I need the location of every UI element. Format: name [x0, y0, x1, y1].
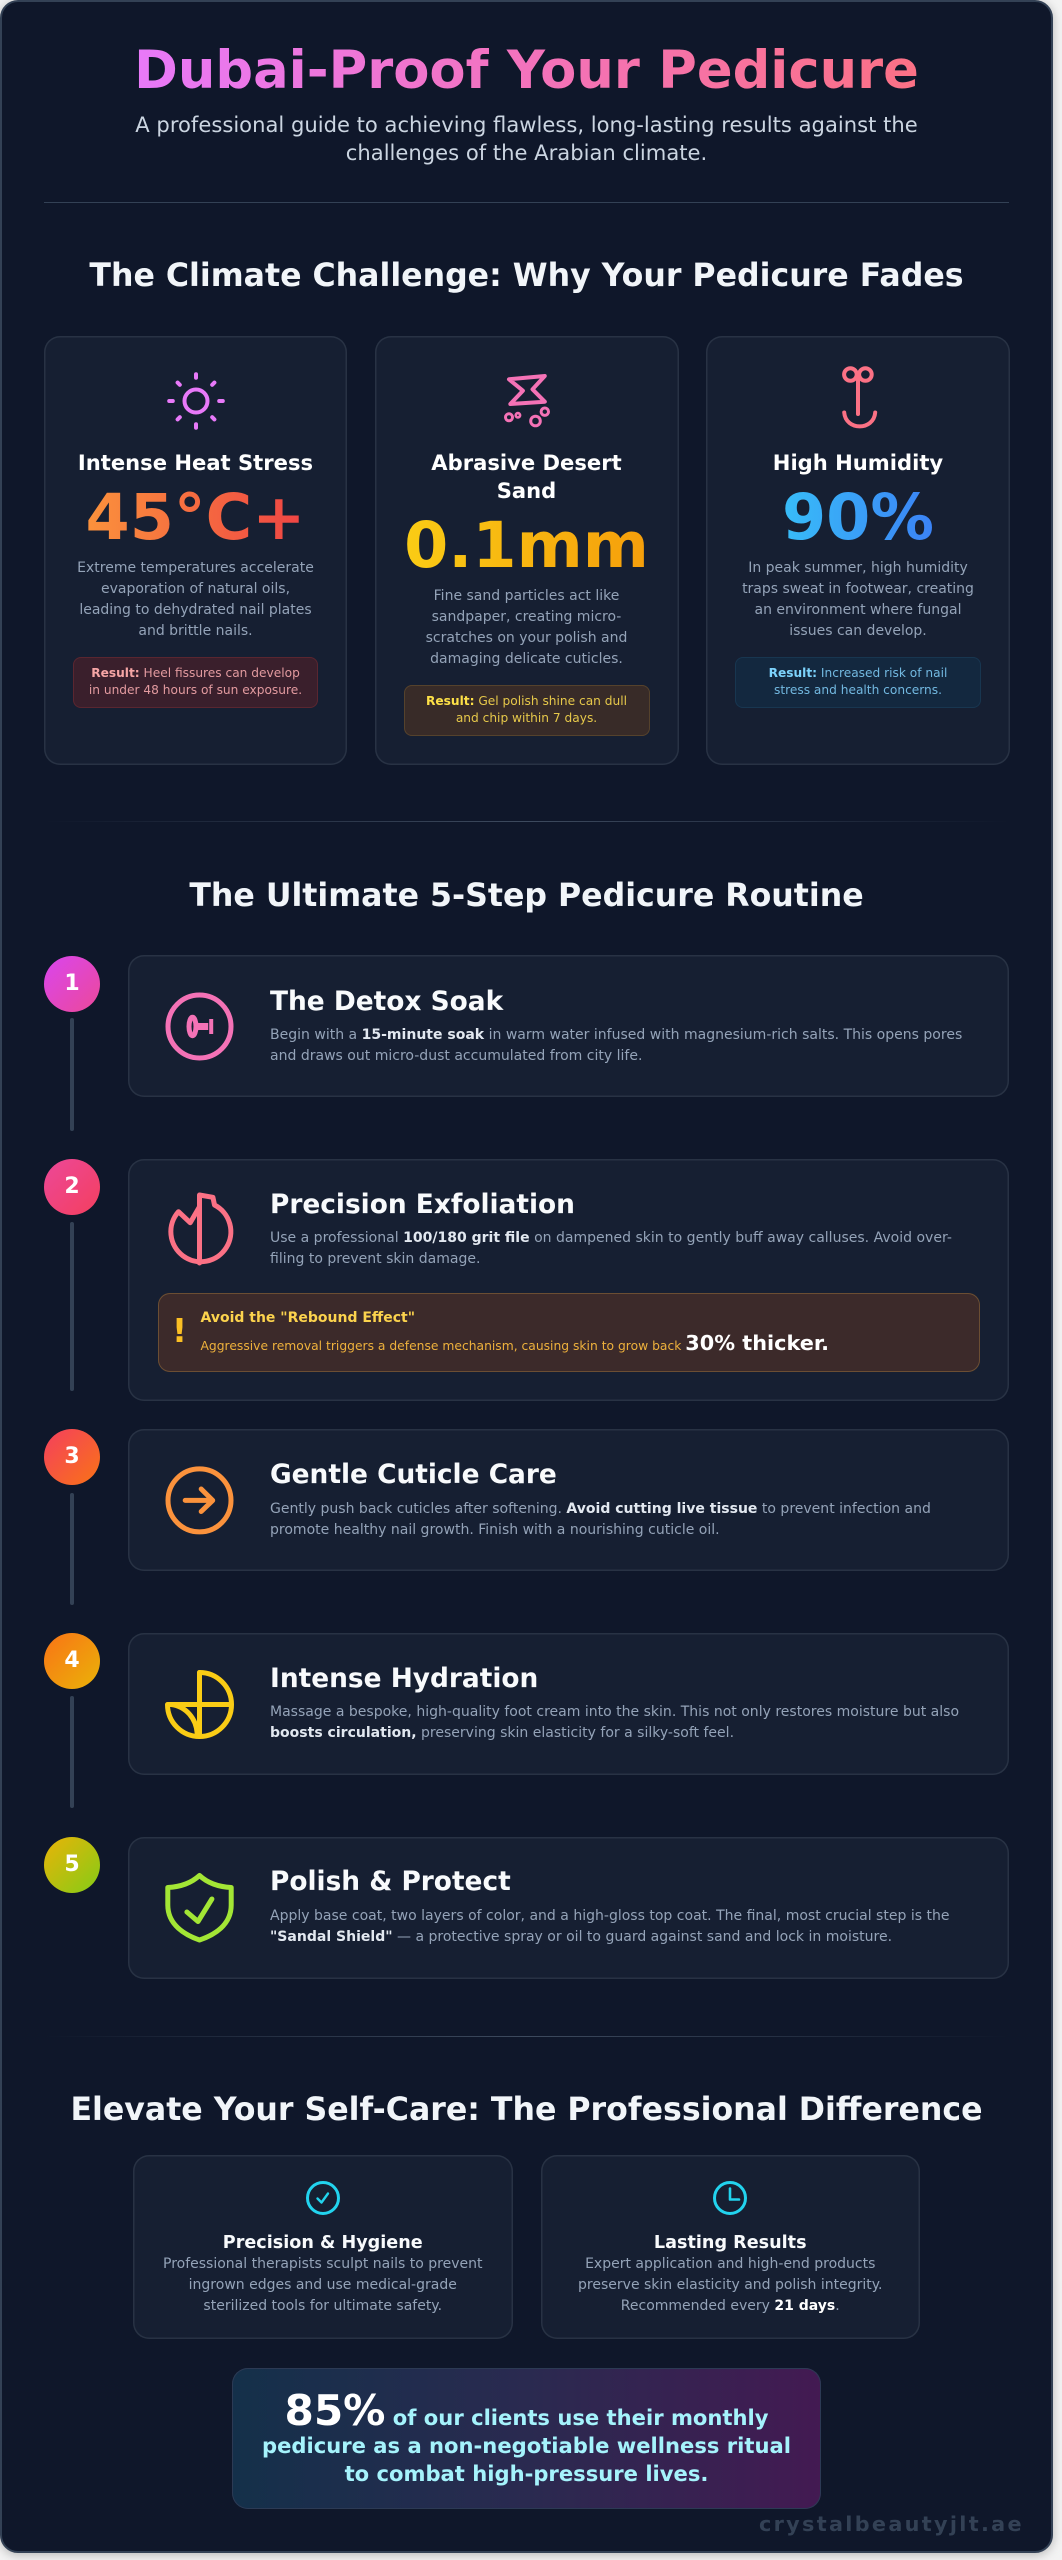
step 1 panel: detox soak [128, 955, 1009, 1097]
step body [270, 1908, 950, 1944]
step body: promote healthy nail growth. Finish with a nourishing cuticle oil. [270, 1522, 720, 1538]
description: Professional therapists sculpt nails to prevent [163, 2256, 482, 2272]
stat: 45°C+: 45°C+ [86, 480, 305, 554]
result callout: Result: Increased risk of nail [769, 666, 947, 680]
step body [270, 1026, 962, 1064]
step 4 number: 4 [64, 1648, 80, 1673]
panel: high humidity [706, 336, 1010, 765]
result callout [735, 657, 981, 708]
step 2 number [44, 1159, 100, 1215]
stat: 0.1mm: 0.1mm [404, 508, 649, 582]
step 3 number: 3 [64, 1444, 80, 1469]
card title: Intense Heat Stress [78, 450, 313, 475]
step 1 number [44, 956, 100, 1012]
step 2 panel: precision exfoliation [128, 1159, 1009, 1401]
heading: 5-step routine: The Ultimate 5-Step Pedicure Routine [189, 878, 864, 914]
panel: abrasive desert sand [374, 336, 678, 765]
step body [270, 1704, 959, 1741]
step 1 number: 1 [64, 970, 80, 996]
step 4 number [44, 1633, 100, 1689]
description: traps sweat in footwear, creating [742, 580, 974, 596]
step title: Gentle Cuticle Care [270, 1458, 557, 1490]
description: In peak summer, high humidity [748, 560, 968, 576]
icon: soak [166, 992, 234, 1060]
icon: hydration [165, 1670, 234, 1739]
watermark: crystalbeautyjlt.ae [759, 2512, 1024, 2536]
description: scratches on your polish and [426, 630, 627, 646]
stat: 90%: 90% [782, 480, 934, 554]
description: evaporation of natural oils, [101, 580, 290, 596]
description: Extreme temperatures accelerate [77, 560, 314, 576]
step body: Massage a bespoke, high-quality foot cream into the skin. This not only restores moisture but also [270, 1704, 959, 1720]
description [578, 2256, 882, 2314]
step body [270, 1230, 952, 1267]
description [77, 560, 314, 638]
step title: The Detox Soak [270, 986, 503, 1016]
step body: filing to prevent skin damage. [270, 1251, 480, 1267]
description: sandpaper, creating micro- [432, 608, 621, 624]
card title [431, 450, 622, 503]
description: sterilized tools for ultimate safety. [203, 2298, 442, 2314]
card title: Sand [497, 478, 556, 503]
step 3 panel: gentle cuticle care [128, 1429, 1009, 1571]
result callout [404, 685, 650, 736]
title: Dubai-Proof Your Pedicure [134, 40, 919, 101]
step body [270, 1500, 931, 1538]
warning callout [158, 1293, 980, 1372]
result callout [73, 657, 318, 708]
card title: Lasting Results [654, 2232, 807, 2252]
description: preserve skin elasticity and polish integrity. [578, 2277, 882, 2293]
icon: clock [713, 2181, 747, 2215]
step 4 panel: intense hydration [128, 1633, 1009, 1775]
step body: Begin with a 15-minute soak in warm water infused with magnesium-rich salts. This opens pores [270, 1026, 962, 1042]
heading: climate challenge: The Climate Challenge: Why Your Pedicure Fades [89, 258, 964, 294]
icon: shield [165, 1872, 234, 1942]
step title: Precision Exfoliation [270, 1188, 575, 1220]
step title: Polish & Protect [270, 1866, 511, 1896]
description [426, 588, 627, 666]
description: and brittle nails. [138, 622, 253, 638]
description: Fine sand particles act like [434, 588, 619, 604]
description [742, 560, 974, 638]
panel: precision and hygiene [133, 2155, 512, 2339]
stat callout: 85%: 85% of our clients use their monthly [284, 2386, 769, 2435]
step body: Gently push back cuticles after softening. Avoid cutting live tissue to prevent infection and [270, 1500, 931, 1516]
icon: humidity [842, 366, 878, 428]
description: leading to dehydrated nail plates [79, 602, 312, 618]
result callout: in under 48 hours of sun exposure. [89, 683, 302, 697]
card title: Abrasive Desert [431, 450, 622, 475]
icon: hourglass and sand [504, 374, 550, 428]
result callout: Result: Gel polish shine can dull [426, 694, 627, 708]
step body: Use a professional 100/180 grit file on dampened skin to gently buff away calluses. Avoid over- [270, 1230, 952, 1246]
callout heading: Avoid the "Rebound Effect" [200, 1310, 415, 1326]
description: damaging delicate cuticles. [430, 650, 623, 666]
step 2 number: 2 [64, 1174, 80, 1199]
step body: boosts circulation, preserving skin elasticity for a silky-soft feel. [270, 1725, 734, 1741]
result callout: Result: Heel fissures can develop [91, 666, 300, 680]
stat callout: 85%: to combat high-pressure lives. [345, 2461, 708, 2486]
icon: arrow circle [166, 1466, 234, 1534]
stat callout: 85%: pedicure as a non-negotiable wellness ritual [262, 2433, 791, 2458]
step 5 number: 5 [64, 1852, 80, 1877]
description: ingrown edges and use medical-grade [189, 2277, 457, 2293]
step title: Intense Hydration [270, 1662, 538, 1694]
step 3 number [44, 1429, 100, 1485]
icon: file [168, 1192, 234, 1266]
icon: check circle [306, 2181, 340, 2215]
result callout: and chip within 7 days. [456, 711, 597, 725]
card title: Precision & Hygiene [223, 2232, 423, 2252]
panel: lasting results [540, 2155, 920, 2339]
step 5 number [44, 1837, 100, 1893]
callout text: Aggressive removal triggers a defense mechanism, causing skin to grow back 30% thicker. [200, 1331, 829, 1355]
step body: "Sandal Shield" — a protective spray or oil to guard against sand and lock in moisture. [270, 1928, 892, 1944]
heading: professional difference: Elevate Your Self-Care: The Professional Difference [70, 2092, 983, 2128]
step 5 panel: polish and protect [128, 1836, 1009, 1978]
subtitle: A professional guide to achieving flawless, long-lasting results against the [135, 112, 918, 136]
icon: sun [167, 372, 225, 430]
subtitle: challenges of the Arabian climate. [346, 140, 707, 164]
stat callout: 85% [232, 2368, 821, 2509]
description: issues can develop. [789, 622, 927, 638]
step body: Apply base coat, two layers of color, and a high-gloss top coat. The final, most crucial step is the [270, 1908, 950, 1924]
description: Recommended every 21 days. [621, 2298, 840, 2314]
result callout: stress and health concerns. [774, 683, 942, 697]
card title: High Humidity [773, 450, 943, 475]
description [163, 2256, 482, 2314]
icon: exclamation: ! [172, 1311, 187, 1350]
step body: and draws out micro-dust accumulated from city life. [270, 1048, 642, 1064]
description: an environment where fungal [754, 602, 962, 618]
subtitle [135, 112, 918, 164]
panel: intense heat stress [44, 336, 347, 765]
description: Expert application and high-end products [585, 2256, 875, 2272]
